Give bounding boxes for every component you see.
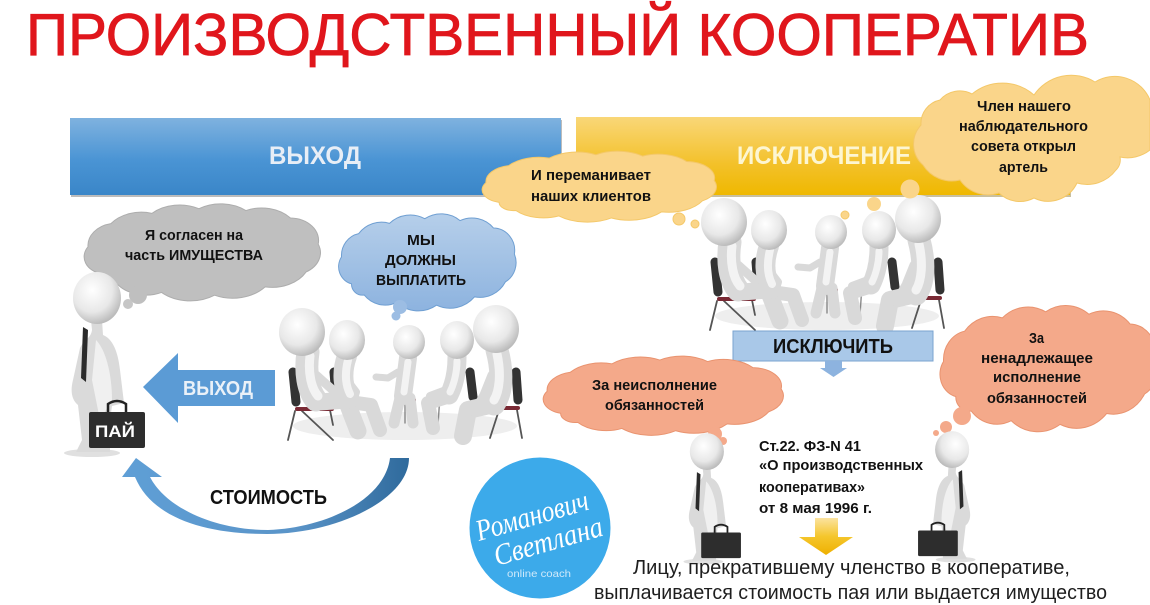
salmon thought cloud right: За <box>1029 330 1045 347</box>
salmon thought cloud left <box>543 356 783 445</box>
logo <box>470 458 610 598</box>
yellow thought cloud left: И переманивает <box>531 167 651 184</box>
box: exclude: ИСКЛЮЧИТЬ <box>773 336 893 358</box>
box: exclude <box>733 331 933 361</box>
curved arrow: value <box>122 458 409 534</box>
salmon thought cloud right: исполнение <box>993 369 1081 386</box>
title: ПРОИЗВОДСТВЕННЫЙ КООПЕРАТИВ <box>26 1 1089 68</box>
gray thought cloud: Я согласен на <box>145 227 244 244</box>
bottom text <box>594 557 1107 604</box>
standing man with share briefcase <box>64 272 145 457</box>
salmon thought cloud right: ненадлежащее <box>981 350 1093 367</box>
arrow: exit <box>143 353 275 423</box>
panel: header exclusion <box>576 117 1071 197</box>
arrow: exit: ВЫХОД <box>183 378 253 400</box>
yellow thought cloud right: Член нашего <box>977 98 1071 115</box>
yellow thought cloud left: наших клиентов <box>531 188 651 205</box>
logo: Светлана <box>490 510 607 573</box>
arrow: yellow down <box>799 518 853 555</box>
panel: header exit: ВЫХОД <box>269 142 361 170</box>
yellow thought cloud right: артель <box>999 159 1048 176</box>
label: value: СТОИМОСТЬ <box>210 487 327 509</box>
small man right <box>918 431 976 562</box>
law reference: «О производственных <box>759 457 924 474</box>
salmon thought cloud right: обязанностей <box>987 390 1087 407</box>
bottom text: Лицу, прекратившему членство в кооперативе, <box>633 557 1070 579</box>
seated group left <box>279 305 522 440</box>
salmon thought cloud left: обязанностей <box>605 397 704 414</box>
yellow thought cloud left <box>482 151 716 228</box>
blue thought cloud: МЫ <box>407 232 435 249</box>
bottom text: выплачивается стоимость пая или выдается имущество <box>594 582 1107 604</box>
logo: online coach <box>507 569 571 580</box>
panel: header exit <box>70 118 562 197</box>
logo: Романович <box>471 484 592 548</box>
salmon thought cloud right <box>933 306 1150 436</box>
yellow thought cloud right: совета открыл <box>971 138 1076 155</box>
law reference: от 8 мая 1996 г. <box>759 500 872 517</box>
blue thought cloud: ДОЛЖНЫ <box>385 252 456 269</box>
seated group right <box>701 195 944 330</box>
standing man with share briefcase: ПАЙ <box>95 422 135 441</box>
law reference: Ст.22. ФЗ-N 41 <box>759 438 861 455</box>
gray thought cloud: часть ИМУЩЕСТВА <box>125 247 263 264</box>
yellow thought cloud right <box>841 75 1150 219</box>
arrow: down from exclude <box>820 361 847 377</box>
small man left <box>683 433 741 564</box>
yellow thought cloud right: наблюдательного <box>959 118 1088 135</box>
law reference: кооперативах» <box>759 479 865 496</box>
salmon thought cloud left: За неисполнение <box>592 377 717 394</box>
panel: header exclusion: ИСКЛЮЧЕНИЕ <box>737 142 911 170</box>
blue thought cloud: ВЫПЛАТИТЬ <box>376 272 466 289</box>
law reference <box>759 438 924 517</box>
blue thought cloud <box>339 214 516 320</box>
gray thought cloud <box>84 204 320 309</box>
